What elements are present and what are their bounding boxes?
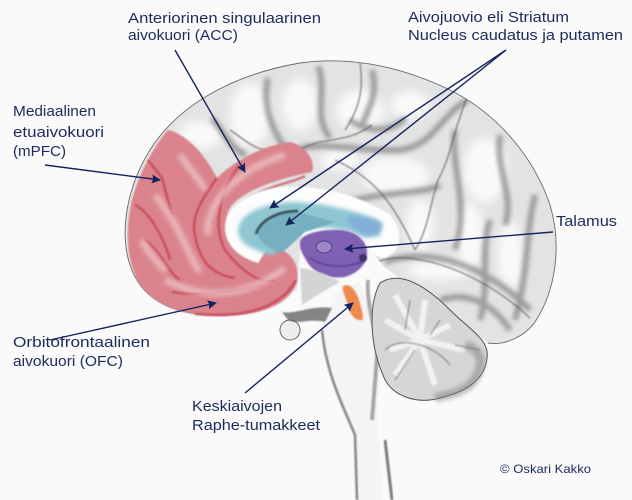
- label: mPFC: [13, 104, 104, 160]
- raphe nuclei (orange): [343, 285, 363, 320]
- label: raphe: [192, 399, 320, 434]
- arrows: striatum: [270, 50, 506, 225]
- arrow: thalamus: [345, 232, 553, 249]
- label: ACC: Anteriorinen singulaarinen: [128, 11, 321, 27]
- credit: © Oskari Kakko: [500, 462, 591, 476]
- label: ACC: aivokuori (ACC): [128, 28, 238, 44]
- label: OFC: Orbitofrontaalinen: [13, 335, 150, 351]
- label: OFC: [13, 335, 150, 370]
- label: striatum: [408, 10, 623, 44]
- label: raphe: Keskiaivojen: [192, 399, 282, 415]
- region: prefrontal and cingulate cortex (red): [128, 130, 313, 316]
- label: OFC: aivokuori (OFC): [13, 354, 123, 370]
- label: ACC: [128, 11, 321, 44]
- label: mPFC: Mediaalinen: [13, 104, 96, 120]
- corpus callosum (white band): [225, 187, 399, 263]
- label: striatum: Aivojuovio eli Striatum: [408, 10, 569, 26]
- pituitary and hypothalamic stalk: [280, 307, 332, 340]
- arrow: OFC: [50, 303, 216, 340]
- striatum: caudate and putamen (teal and blue): [238, 202, 382, 256]
- arrow: raphe: [245, 303, 353, 393]
- brainstem and spinal cord: [300, 268, 392, 500]
- label: raphe: Raphe-tumakkeet: [192, 418, 320, 434]
- arrow: ACC: [175, 50, 245, 172]
- label: thalamus: Talamus: [556, 214, 617, 230]
- cerebrum: grey cortex: [125, 61, 556, 344]
- label: striatum: Nucleus caudatus ja putamen: [408, 28, 623, 44]
- label: mPFC: (mPFC): [13, 144, 66, 160]
- label: mPFC: etuaivokuori: [13, 125, 104, 141]
- thalamus (purple): [300, 230, 367, 278]
- cerebellum: [372, 278, 487, 400]
- arrow: mPFC: [45, 165, 160, 180]
